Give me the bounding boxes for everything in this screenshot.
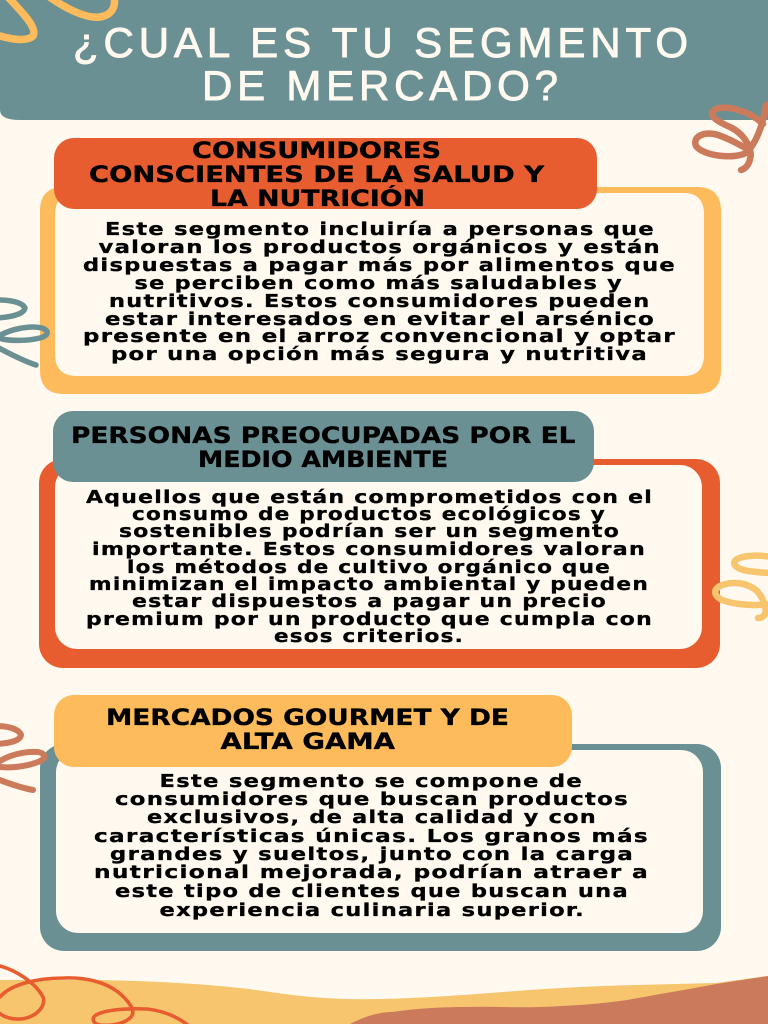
heading pill: CONSUMIDORES bbox=[192, 139, 441, 164]
heading pill bbox=[54, 138, 597, 212]
title: ¿CUAL ES TU SEGMENTO bbox=[73, 19, 688, 66]
heading pill: PERSONAS PREOCUPADAS POR EL bbox=[71, 424, 576, 449]
body text: valoran los productos orgánicos y están bbox=[98, 238, 661, 258]
body text: exclusivos, de alta calidad y con bbox=[147, 808, 597, 828]
body text: nutritivos. Estos consumidores pueden bbox=[109, 292, 650, 312]
body text: importante. Estos consumidores valoran bbox=[92, 540, 646, 560]
body text: este tipo de clientes que buscan una bbox=[115, 882, 629, 902]
body text: estar dispuestos a pagar un precio bbox=[132, 592, 607, 612]
heading pill bbox=[54, 695, 572, 767]
panel: mercados gourmet bbox=[40, 695, 721, 951]
body text: Este segmento incluiría a personas que bbox=[105, 220, 655, 240]
header banner bbox=[0, 0, 768, 120]
heading pill: CONSCIENTES DE LA SALUD Y bbox=[89, 163, 545, 188]
panel: consumidores conscientes bbox=[40, 138, 721, 394]
body text: minimizan el impacto ambiental y pueden bbox=[89, 575, 649, 595]
body text: características únicas. Los granos más bbox=[94, 827, 649, 847]
body text: Este segmento se compone de bbox=[160, 772, 583, 792]
body text: sostenibles podrían ser un segmento bbox=[119, 522, 620, 542]
icon: yellow scribble right bbox=[715, 556, 768, 618]
heading pill: MERCADOS GOURMET Y DE bbox=[106, 706, 509, 731]
body text: consumidores que buscan productos bbox=[115, 790, 629, 810]
body text: experiencia culinaria superior. bbox=[160, 901, 585, 921]
body text: grandes y sueltos, junto con la carga bbox=[110, 845, 634, 865]
body text bbox=[83, 220, 676, 365]
title: DE MERCADO? bbox=[202, 62, 558, 109]
body text: nutricional mejorada, podrían atraer a bbox=[94, 863, 649, 883]
icon: teal scribble left bbox=[0, 300, 47, 365]
body text: los métodos de cultivo orgánico que bbox=[127, 558, 611, 578]
body text: se perciben como más saludables y bbox=[134, 274, 623, 294]
panel frame bbox=[39, 459, 720, 668]
icon: yellow scribble top left bbox=[0, 0, 114, 39]
panel frame bbox=[40, 744, 721, 951]
body text: estar interesados en evitar el arsénico bbox=[105, 310, 655, 330]
panel frame bbox=[40, 187, 721, 394]
icon: bottom waves bbox=[0, 976, 768, 1024]
body text: presente en el arroz convencional y optar bbox=[83, 327, 676, 347]
body text: premium por un producto que cumpla con bbox=[86, 610, 653, 630]
icon: coral scribble top right bbox=[695, 105, 766, 170]
heading pill: LA NUTRICIÓN bbox=[210, 186, 425, 212]
body text: dispuestas a pagar más por alimentos que bbox=[83, 256, 676, 276]
heading pill bbox=[53, 411, 594, 482]
body text: esos criterios. bbox=[274, 627, 464, 647]
body text bbox=[86, 488, 653, 647]
body text: Aquellos que están comprometidos con el bbox=[86, 488, 653, 508]
body text: por una opción más segura y nutritiva bbox=[111, 345, 648, 365]
heading pill: MEDIO AMBIENTE bbox=[198, 448, 448, 473]
body text bbox=[94, 772, 649, 921]
heading pill: ALTA GAMA bbox=[220, 730, 395, 755]
icon: coral scribble left bbox=[0, 726, 44, 790]
icon: orange scribble bottom left bbox=[0, 966, 189, 1024]
title bbox=[73, 19, 688, 109]
panel: personas preocupadas bbox=[39, 411, 720, 668]
body text: consumo de productos ecológicos y bbox=[132, 505, 606, 525]
